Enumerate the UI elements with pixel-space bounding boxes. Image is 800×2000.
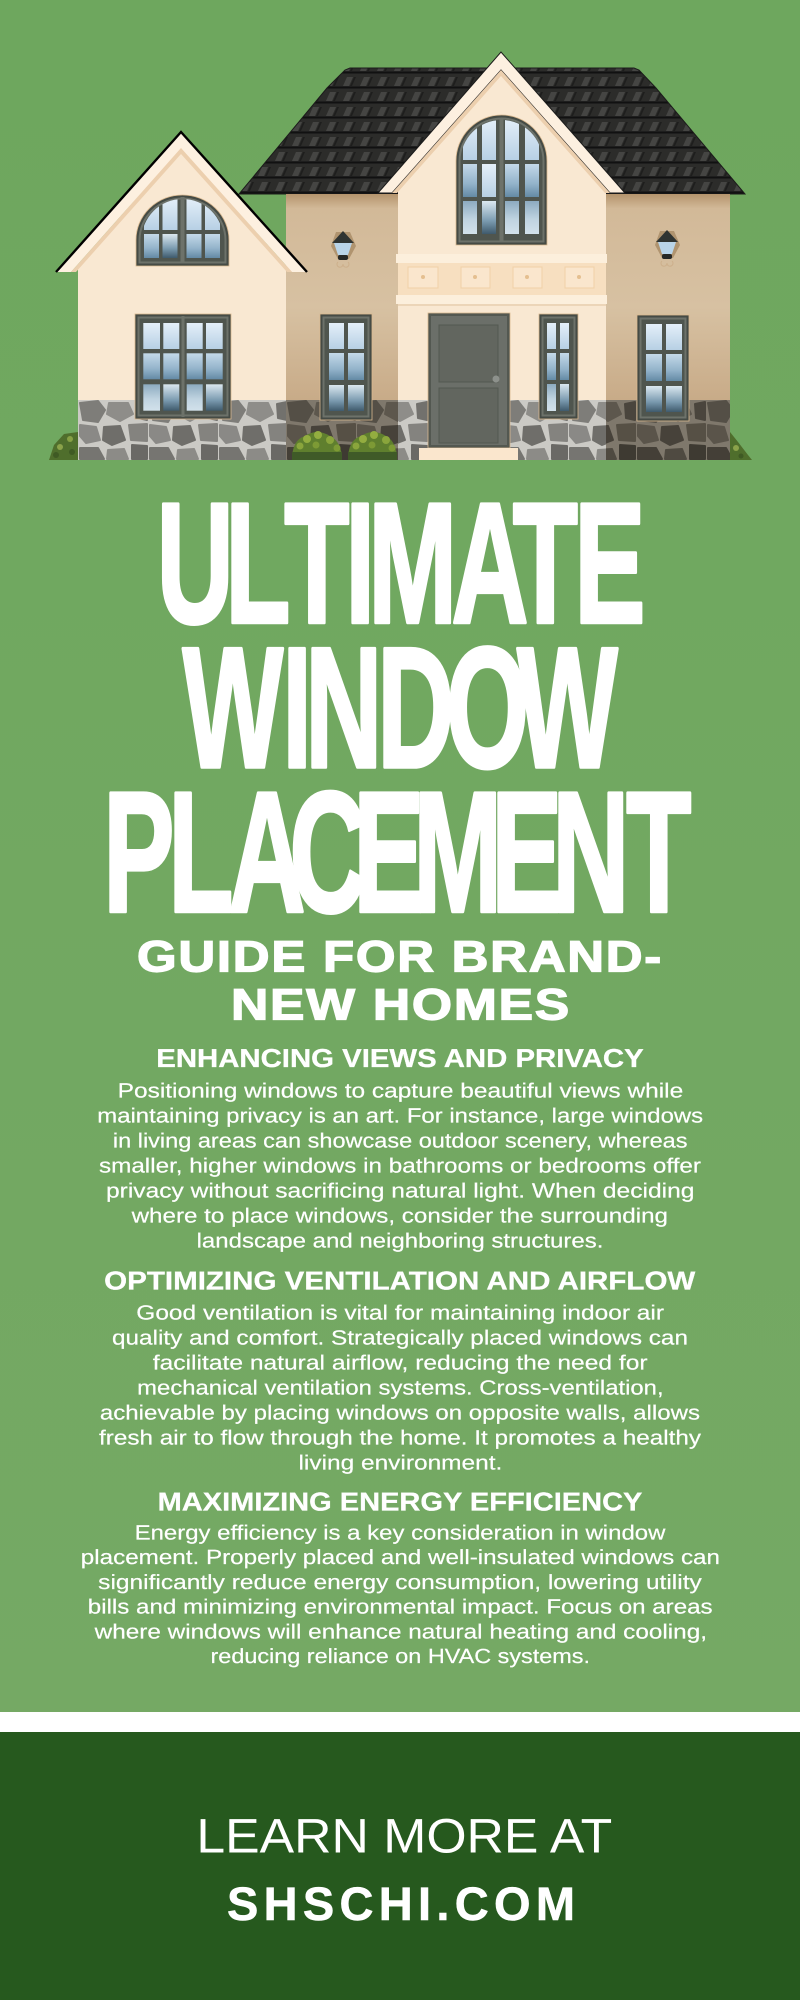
window: right [637, 315, 689, 421]
house: frieze band [396, 254, 607, 306]
text block: optimizing ventilation: Good ventilation is vital for maintaining indoor air [136, 1301, 664, 1324]
window: middle left [320, 314, 372, 420]
title [103, 468, 691, 948]
illustration: house [49, 52, 752, 460]
text block: enhancing views: Positioning windows to capture beautiful views while [118, 1080, 683, 1103]
house: center gable trim [378, 52, 625, 193]
window: small arched left [136, 195, 229, 266]
text block: optimizing ventilation: quality and comfort. Strategically placed windows can [112, 1326, 688, 1349]
footer panel [0, 1732, 800, 2000]
text block: maximizing energy: placement. Properly placed and well-insulated windows can [81, 1546, 720, 1569]
house: main roof [239, 68, 745, 194]
shrubs [49, 431, 752, 460]
title: PLACEMENT [103, 756, 691, 948]
window: tall arched center [456, 115, 547, 245]
text block: maximizing energy: Energy efficiency is a key consideration in window [135, 1521, 666, 1544]
subtitle [137, 932, 663, 1030]
text block: optimizing ventilation: living environment. [298, 1451, 502, 1474]
text block: optimizing ventilation: achievable by placing windows on opposite walls, allows [100, 1401, 700, 1424]
text block: maximizing energy: reducing reliance on HVAC systems. [210, 1645, 590, 1668]
footer text: website: SHSCHI.COM [227, 1877, 575, 1930]
door step [419, 448, 518, 460]
text block: enhancing views: where to place windows, consider the surrounding [130, 1204, 668, 1227]
subtitle: NEW HOMES [231, 980, 571, 1030]
door [428, 313, 510, 448]
text block: optimizing ventilation: facilitate natural airflow, reducing the need for [153, 1351, 648, 1374]
window: narrow beside door [539, 314, 578, 419]
text block: maximizing energy: bills and minimizing environmental impact. Focus on areas [88, 1595, 713, 1618]
house: tan side walls [286, 194, 730, 400]
text block: enhancing views: privacy without sacrificing natural light. When deciding [106, 1179, 694, 1202]
subtitle: GUIDE FOR BRAND- [137, 932, 663, 982]
text block: optimizing ventilation: fresh air to flow through the home. It promotes a healthy [99, 1426, 702, 1449]
text block: optimizing ventilation [99, 1301, 702, 1474]
section: enhancing views and privacy [97, 1043, 703, 1252]
text block: enhancing views: in living areas can showcase outdoor scenery, whereas [113, 1129, 687, 1152]
house: center wall [398, 64, 606, 460]
lamp: right [655, 230, 680, 266]
house: stone base [78, 400, 730, 460]
title: WINDOW [183, 612, 618, 804]
section: maximizing energy efficiency [81, 1487, 720, 1668]
text block: maximizing energy [81, 1521, 720, 1668]
title: ULTIMATE [157, 468, 645, 660]
text block: enhancing views: landscape and neighboring structures. [197, 1229, 603, 1252]
window: large lower left [135, 314, 231, 419]
house: left wing wall [78, 146, 286, 460]
lamp: left [331, 231, 356, 267]
heading: optimizing ventilation: OPTIMIZING VENTILATION AND AIRFLOW [104, 1265, 696, 1295]
text block: enhancing views: smaller, higher windows in bathrooms or bedrooms offer [99, 1154, 701, 1177]
text block: maximizing energy: significantly reduce energy consumption, lowering utility [98, 1571, 703, 1594]
text block: enhancing views [97, 1080, 703, 1252]
heading: enhancing views: ENHANCING VIEWS AND PRIVACY [156, 1043, 644, 1073]
footer text: learn more: LEARN MORE AT [196, 1810, 612, 1864]
text block: optimizing ventilation: mechanical ventilation systems. Cross-ventilation, [137, 1376, 664, 1399]
house: left gable trim [56, 132, 307, 272]
heading: maximizing energy: MAXIMIZING ENERGY EFFICIENCY [158, 1487, 642, 1517]
section: optimizing ventilation [99, 1265, 702, 1474]
text block: enhancing views: maintaining privacy is an art. For instance, large windows [97, 1104, 703, 1127]
text block: maximizing energy: where windows will enhance natural heating and cooling, [94, 1620, 707, 1643]
